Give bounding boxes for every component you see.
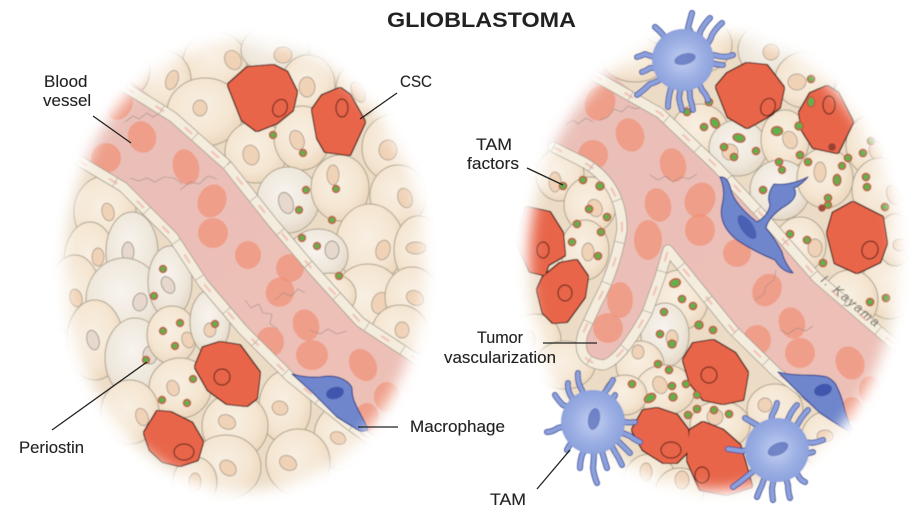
TAM lower left <box>547 373 640 483</box>
cells: upper right tissue <box>142 38 428 346</box>
periostin dots <box>143 132 342 406</box>
macrophage on vessel <box>292 374 368 432</box>
TAM top <box>637 13 733 110</box>
panel: tumor tissue oval <box>505 13 921 512</box>
label: TAM factors: TAM <box>476 135 512 154</box>
signature: I. Kayama <box>818 272 883 330</box>
label: blood vessel: vessel <box>43 91 91 110</box>
macrophage lower right <box>778 372 853 431</box>
label: blood vessel <box>43 72 131 143</box>
TAM factor dots <box>559 75 890 419</box>
label: Tumor vascularization <box>444 328 597 367</box>
label: Periostin <box>19 362 147 457</box>
cancer stem cells <box>517 64 886 494</box>
label: TAM factors <box>467 135 563 185</box>
TAM lower right <box>728 403 823 500</box>
label: Periostin: Periostin <box>19 438 84 457</box>
cancer stem cells <box>146 66 364 464</box>
cells: lower left tissue <box>62 176 356 495</box>
label: TAM <box>490 450 570 509</box>
panel: normal tissue oval <box>58 34 433 498</box>
cells: upper right tumor tissue <box>612 30 902 320</box>
title: GLIOBLASTOMA <box>387 9 576 32</box>
label: TAM factors: factors <box>467 154 519 173</box>
vessel walls <box>78 87 430 443</box>
blood vessel with branch <box>554 72 888 422</box>
label: CSC: CSC <box>400 72 432 91</box>
label: Macrophage: Macrophage <box>410 417 505 436</box>
label: CSC <box>360 72 432 119</box>
blood vessel <box>85 84 410 432</box>
label: Tumor vascularization: Tumor <box>477 328 523 347</box>
cells: left pocket and lower tumor tissue <box>530 151 838 494</box>
label: TAM: TAM <box>490 490 526 509</box>
label: blood vessel: Blood <box>44 72 87 91</box>
vessel walls and branch <box>553 75 895 434</box>
label: Tumor vascularization: vascularization <box>444 348 556 367</box>
macrophage crossing vessel wall <box>720 177 808 273</box>
